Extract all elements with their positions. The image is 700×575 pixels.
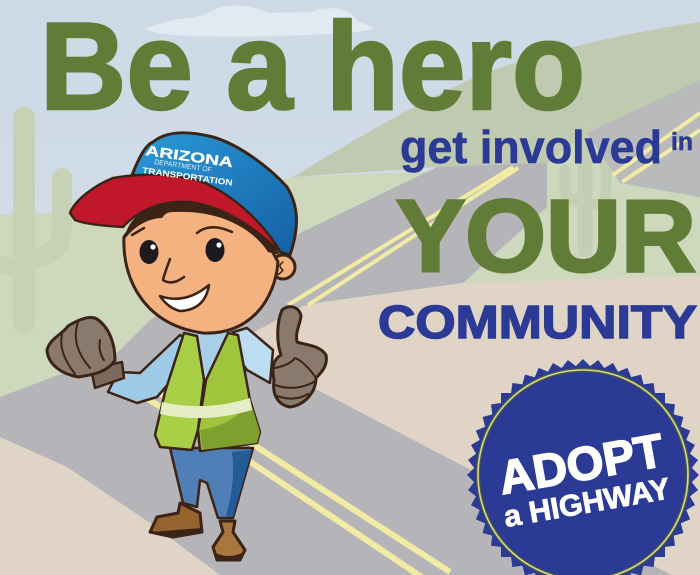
cap logo text: TRANSPORTATION bbox=[142, 165, 233, 188]
cap logo text bbox=[142, 142, 234, 188]
cap brim bbox=[70, 175, 281, 253]
left arm bbox=[108, 335, 198, 403]
badge label: ADOPT bbox=[495, 423, 668, 504]
back hill bbox=[293, 22, 700, 200]
cap logo text: ARIZONA bbox=[145, 142, 234, 170]
cactus left bbox=[0, 118, 62, 323]
desert land bbox=[0, 160, 700, 430]
cactus right bbox=[565, 118, 606, 250]
head bbox=[124, 200, 278, 333]
badge: Adopt a Highway bbox=[467, 359, 699, 575]
road markings bbox=[120, 113, 700, 575]
tan ground bbox=[0, 276, 700, 575]
ear bbox=[271, 255, 295, 279]
heading: YOUR: YOUR bbox=[396, 179, 696, 293]
subheading: get involved in: get involved bbox=[400, 121, 662, 173]
character: road worker bbox=[47, 133, 326, 561]
badge scalloped edge bbox=[467, 359, 699, 575]
right arm bbox=[230, 328, 273, 383]
badge ring bbox=[478, 370, 688, 575]
badge label bbox=[493, 423, 673, 534]
hair bbox=[124, 202, 280, 255]
light field right bbox=[463, 133, 700, 285]
far road bbox=[587, 80, 700, 197]
vest bbox=[155, 333, 260, 451]
badge label: a HIGHWAY bbox=[501, 472, 673, 534]
nose bbox=[163, 259, 184, 282]
cap logo text: DEPARTMENT OF bbox=[154, 159, 212, 174]
right boot bbox=[213, 521, 245, 561]
legs bbox=[170, 448, 253, 518]
eyes bbox=[140, 238, 224, 264]
left boot bbox=[150, 503, 203, 538]
cap crown bbox=[132, 133, 296, 255]
title: Be a hero: Be a hero bbox=[40, 0, 585, 136]
heading: COMMUNITY: COMMUNITY bbox=[378, 296, 697, 348]
right glove bbox=[273, 307, 326, 407]
shirt bbox=[190, 332, 232, 430]
upper road bbox=[0, 163, 700, 575]
brows bbox=[132, 227, 232, 235]
subheading: get involved in: in bbox=[671, 128, 693, 156]
left glove bbox=[47, 318, 124, 388]
smile bbox=[160, 285, 209, 311]
cloud bbox=[146, 6, 373, 37]
